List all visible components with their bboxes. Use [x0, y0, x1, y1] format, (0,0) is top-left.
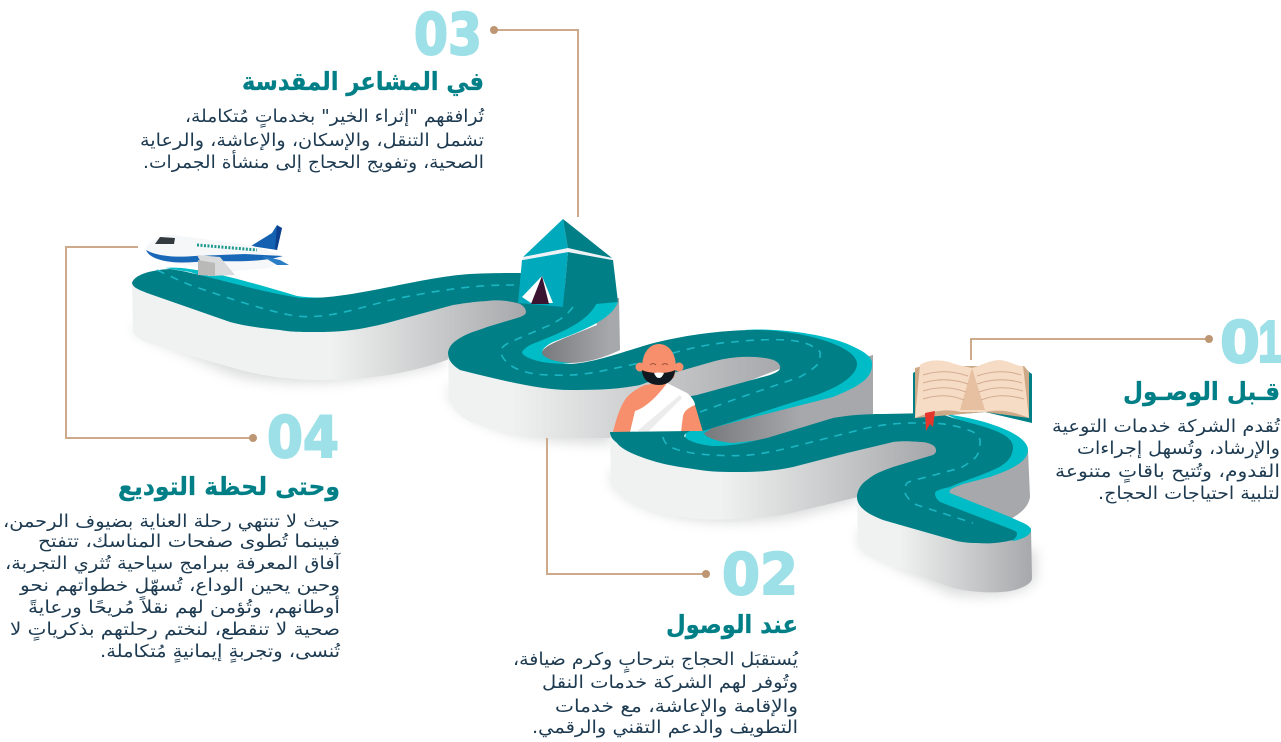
body text 03 — [140, 107, 484, 173]
road shadows — [135, 325, 1036, 596]
body text 04: أوطانهم، وتُؤمن لهم نقلاً مُريحًا ورعايةً — [28, 595, 340, 618]
road edge: cyan right bend — [930, 414, 1031, 541]
icon: open book — [913, 360, 1032, 431]
road edge: cyan hairpin — [700, 330, 872, 436]
body text 01 — [1052, 417, 1280, 504]
road edge: cyan strip top left — [165, 268, 340, 300]
wall: first band — [132, 283, 530, 380]
panel: step 03 — [140, 2, 484, 173]
number 02: 02 — [722, 542, 798, 608]
body text 02: التطويف والدعم التقني والرقمي. — [532, 718, 798, 738]
body text 04: تُنسى، وتجربةٍ إيمانيةٍ مُتكاملة. — [100, 642, 340, 663]
body text 03: تُرافقهم "إثراء الخير" بخدماتٍ مُتكاملة، — [185, 107, 484, 128]
wall: second band — [448, 350, 782, 438]
panel: step 04 — [3, 405, 341, 663]
body text 04: فبينما تُطوى صفحات المناسك، تتفتح — [38, 532, 340, 552]
road edge: cyan lobe lower — [685, 431, 760, 449]
body text 04: حيث لا تنتهي رحلة العناية بضيوف الرحمن، — [3, 512, 340, 532]
connector: step 01 — [971, 335, 1213, 360]
wall: hairpin right side — [690, 355, 873, 445]
panel: step 02 — [513, 542, 798, 738]
body text 01: لتلبية احتياجات الحجاج. — [1098, 484, 1280, 504]
body text 02: وتُوفر لهم الشركة خدمات النقل — [542, 673, 798, 693]
body text 01: تُقدم الشركة خدمات التوعية — [1052, 417, 1280, 437]
wall: last band — [857, 497, 1032, 592]
icon: tent — [518, 219, 618, 307]
body text 03: تشمل التنقل، والإسكان، والإعاشة، والرعاية — [140, 131, 484, 151]
heading 02: عند الوصول — [666, 610, 798, 640]
body text 04: صحية لا تنقطع، لنختم رحلتهم بذكرياتٍ لا — [10, 620, 340, 641]
heading 03: في المشاعر المقدسة — [242, 67, 484, 97]
dashed centre line: upper road — [157, 270, 520, 317]
road surface: lower — [610, 413, 1017, 543]
body text 02: يُستقبَل الحجاج بترحابٍ وكرم ضيافة، — [513, 650, 798, 673]
panel: step 01 — [1052, 309, 1281, 504]
connector: step 02 — [547, 438, 710, 578]
number 01 — [1220, 309, 1281, 376]
body text 02: والإقامة والإعاشة، مع خدمات — [555, 697, 798, 717]
dashed centre line: lower road — [663, 423, 980, 523]
body text 02 — [513, 650, 798, 738]
body text 04 — [3, 512, 341, 663]
wall: right side — [930, 450, 1030, 525]
wall: lower hole — [700, 412, 870, 460]
road surface: upper — [132, 269, 857, 432]
body text 01: والإرشاد، وتُسهل إجراءات — [1077, 439, 1280, 459]
body text 01: القدوم، وتُتيح باقاتٍ متنوعة — [1055, 462, 1280, 483]
number 01: 0 — [1220, 310, 1260, 376]
connector: step 04 — [66, 247, 257, 442]
road edge: cyan lobe at tent — [518, 298, 618, 366]
number 04: 04 — [267, 405, 339, 471]
heading 04: وحتى لحظة التوديع — [118, 472, 340, 502]
wall: tent bend hole — [541, 298, 620, 363]
connector: step 03 — [490, 26, 578, 217]
body text 03: الصحية، وتفويج الحجاج إلى منشأة الجمرات. — [143, 150, 484, 173]
body text 04: وحين يحين الوداع، تُسهّل خطواتهم نحو — [19, 576, 340, 596]
number 03: 03 — [414, 2, 482, 68]
man figure — [613, 344, 703, 432]
body text 04: آفاق المعرفة ببرامج سياحية تُثري التجربة، — [5, 552, 341, 574]
wall: third band — [610, 432, 945, 520]
icon: airplane — [146, 225, 289, 276]
road illustration — [132, 219, 1036, 596]
